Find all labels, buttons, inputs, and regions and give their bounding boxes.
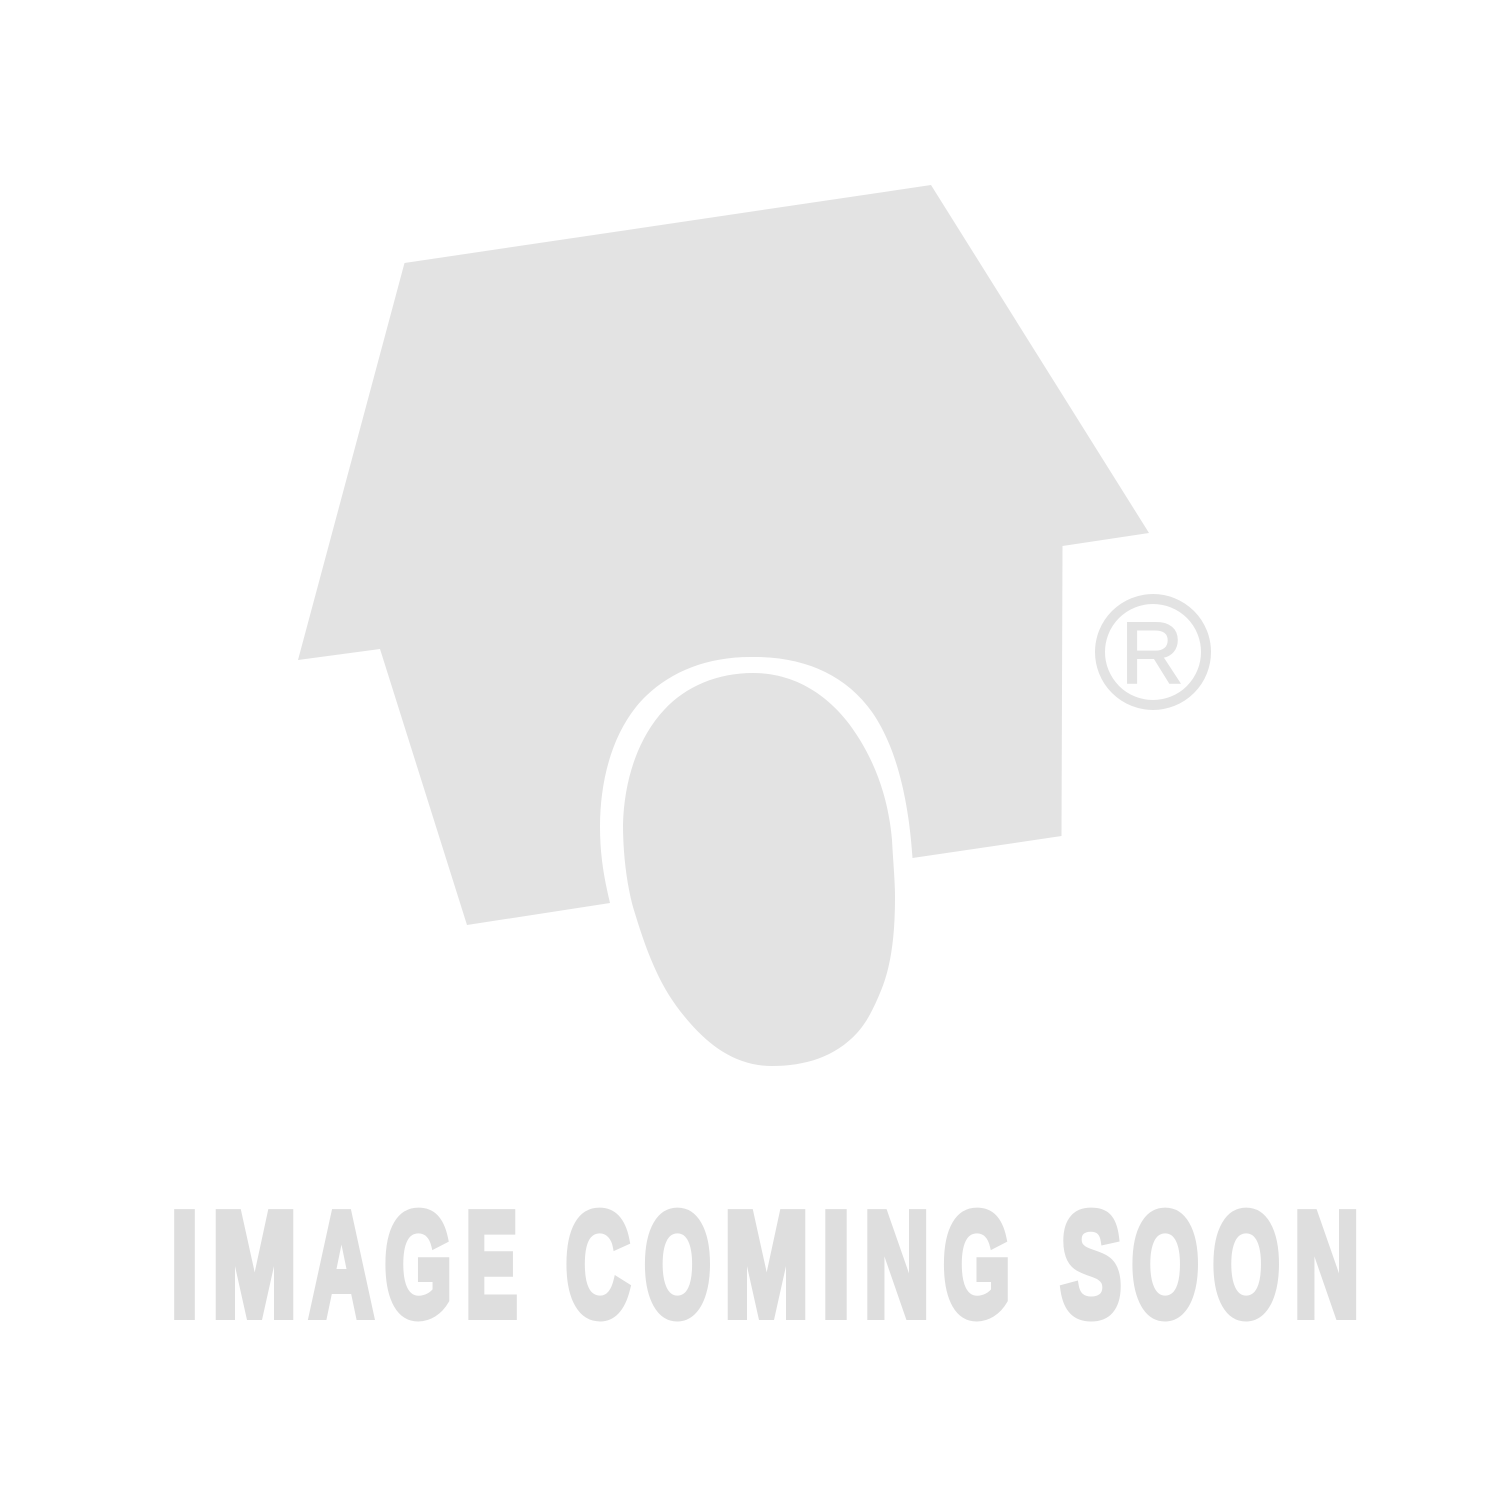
title: image coming soon: C	[566, 1182, 630, 1348]
title: image coming soon: N	[1294, 1182, 1360, 1348]
title: image coming soon: I	[822, 1182, 850, 1348]
icon: house logo	[298, 185, 1149, 925]
title: image coming soon: E	[466, 1182, 518, 1348]
title: image coming soon: M	[212, 1182, 297, 1348]
title: image coming soon: M	[724, 1182, 809, 1348]
title: image coming soon: N	[864, 1182, 930, 1348]
icon: oval door	[623, 673, 895, 1066]
title: image coming soon: G	[943, 1182, 1010, 1348]
icon: registered mark: R	[1121, 606, 1183, 702]
title: image coming soon: G	[384, 1182, 452, 1348]
title: image coming soon: S	[1060, 1182, 1122, 1348]
title: image coming soon: O	[1132, 1182, 1199, 1348]
title: image coming soon: A	[310, 1182, 374, 1348]
icon: registered mark	[1100, 599, 1206, 705]
title: image coming soon: I	[170, 1182, 198, 1348]
title: image coming soon: O	[1212, 1182, 1280, 1348]
title: image coming soon: O	[644, 1182, 711, 1348]
